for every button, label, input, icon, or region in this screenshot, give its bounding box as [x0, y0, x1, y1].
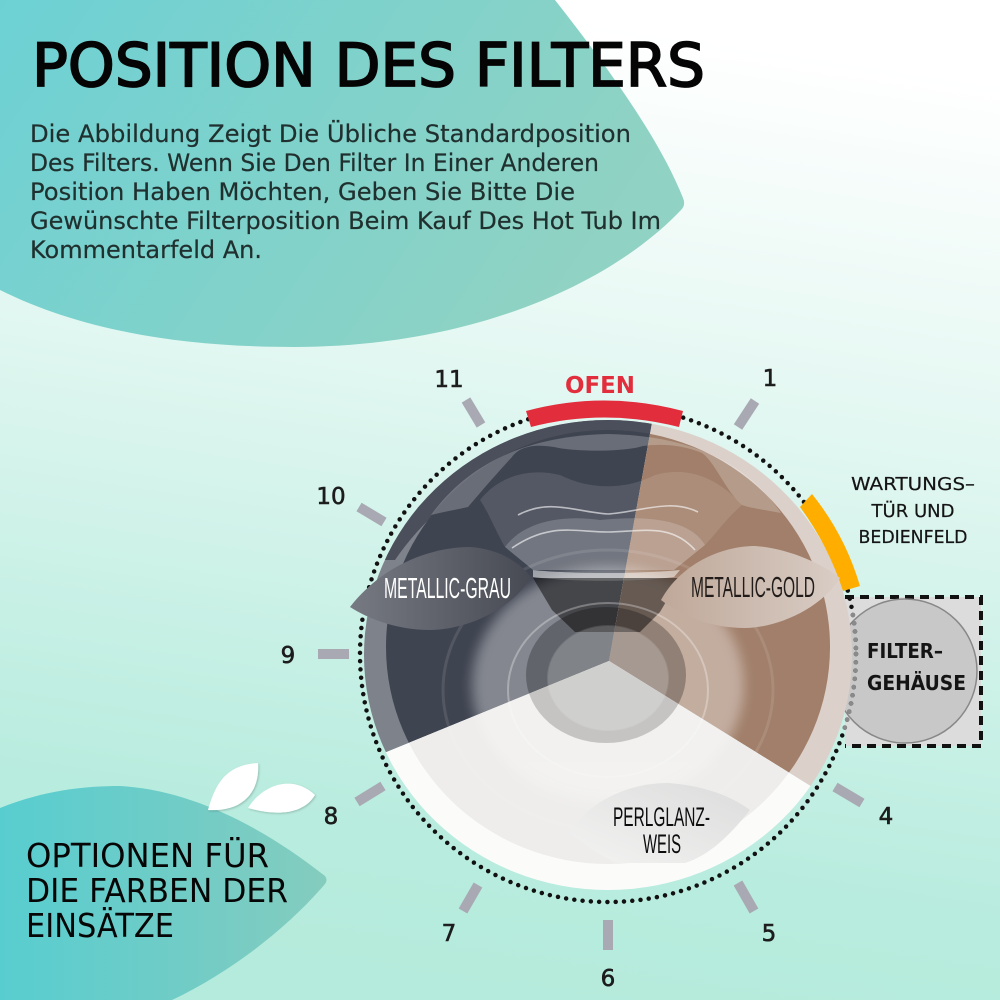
sector: metallic grey [364, 420, 652, 752]
sector: pearl white [386, 661, 810, 890]
filter housing [833, 597, 981, 746]
sector: metallic gold [609, 424, 852, 786]
clock numbers: 10 [316, 484, 346, 510]
label: metallic grey: METALLIC-GRAU [384, 573, 511, 605]
clock numbers: 11 [434, 367, 464, 393]
heading: colour options [26, 835, 288, 945]
icon: white leaves [208, 763, 315, 813]
clock numbers: 4 [879, 804, 893, 830]
oven label: OFEN [565, 373, 635, 399]
clock numbers: 6 [601, 966, 615, 992]
panel: top teal blob [0, 0, 684, 347]
panel: bottom left leaf [0, 786, 326, 1000]
clock numbers: 5 [762, 921, 776, 947]
clock numbers: 7 [442, 921, 456, 947]
heading: colour options: EINSÄTZE [26, 906, 174, 945]
heading: colour options: DIE FARBEN DER [26, 871, 288, 910]
label: pearl white: PERLGLANZ- [613, 802, 710, 832]
oven marker arc [526, 400, 683, 427]
text block: filter position description: Gewünschte Filterposition Beim Kauf Des Hot Tub Im [30, 207, 661, 235]
label: metallic gold [661, 546, 840, 628]
label: metallic grey [350, 547, 531, 630]
label: pearl white [569, 783, 750, 863]
service door label [851, 474, 975, 548]
dotted circle [360, 406, 856, 902]
text block: filter position description: Die Abbildung Zeigt Die Übliche Standardposition [30, 119, 631, 148]
title: POSITION DES FILTERS [32, 31, 705, 101]
service door label: TÜR UND [870, 500, 954, 522]
service door label: WARTUNGS– [851, 474, 975, 495]
clock ticks [318, 400, 862, 950]
label: pearl white: WEIS [643, 829, 681, 859]
clock numbers: 9 [281, 643, 295, 669]
service door label: BEDIENFELD [858, 527, 968, 548]
clock numbers: 1 [763, 366, 777, 392]
text block: filter position description: Des Filters. Wenn Sie Den Filter In Einer Anderen [30, 149, 599, 177]
service door marker arc [800, 494, 860, 591]
text block: filter position description: Position Haben Möchten, Geben Sie Bitte Die [30, 178, 575, 206]
filter housing: GEHÄUSE [867, 670, 966, 695]
label: metallic gold: METALLIC-GOLD [691, 572, 815, 604]
hot tub with three colour sectors [364, 420, 852, 890]
clock numbers [281, 366, 893, 992]
heading: colour options: OPTIONEN FÜR [26, 835, 269, 875]
clock numbers: 8 [324, 804, 338, 830]
filter housing: FILTER– [867, 639, 943, 663]
text block: filter position description [30, 119, 661, 264]
text block: filter position description: Kommentarfeld An. [30, 236, 262, 264]
